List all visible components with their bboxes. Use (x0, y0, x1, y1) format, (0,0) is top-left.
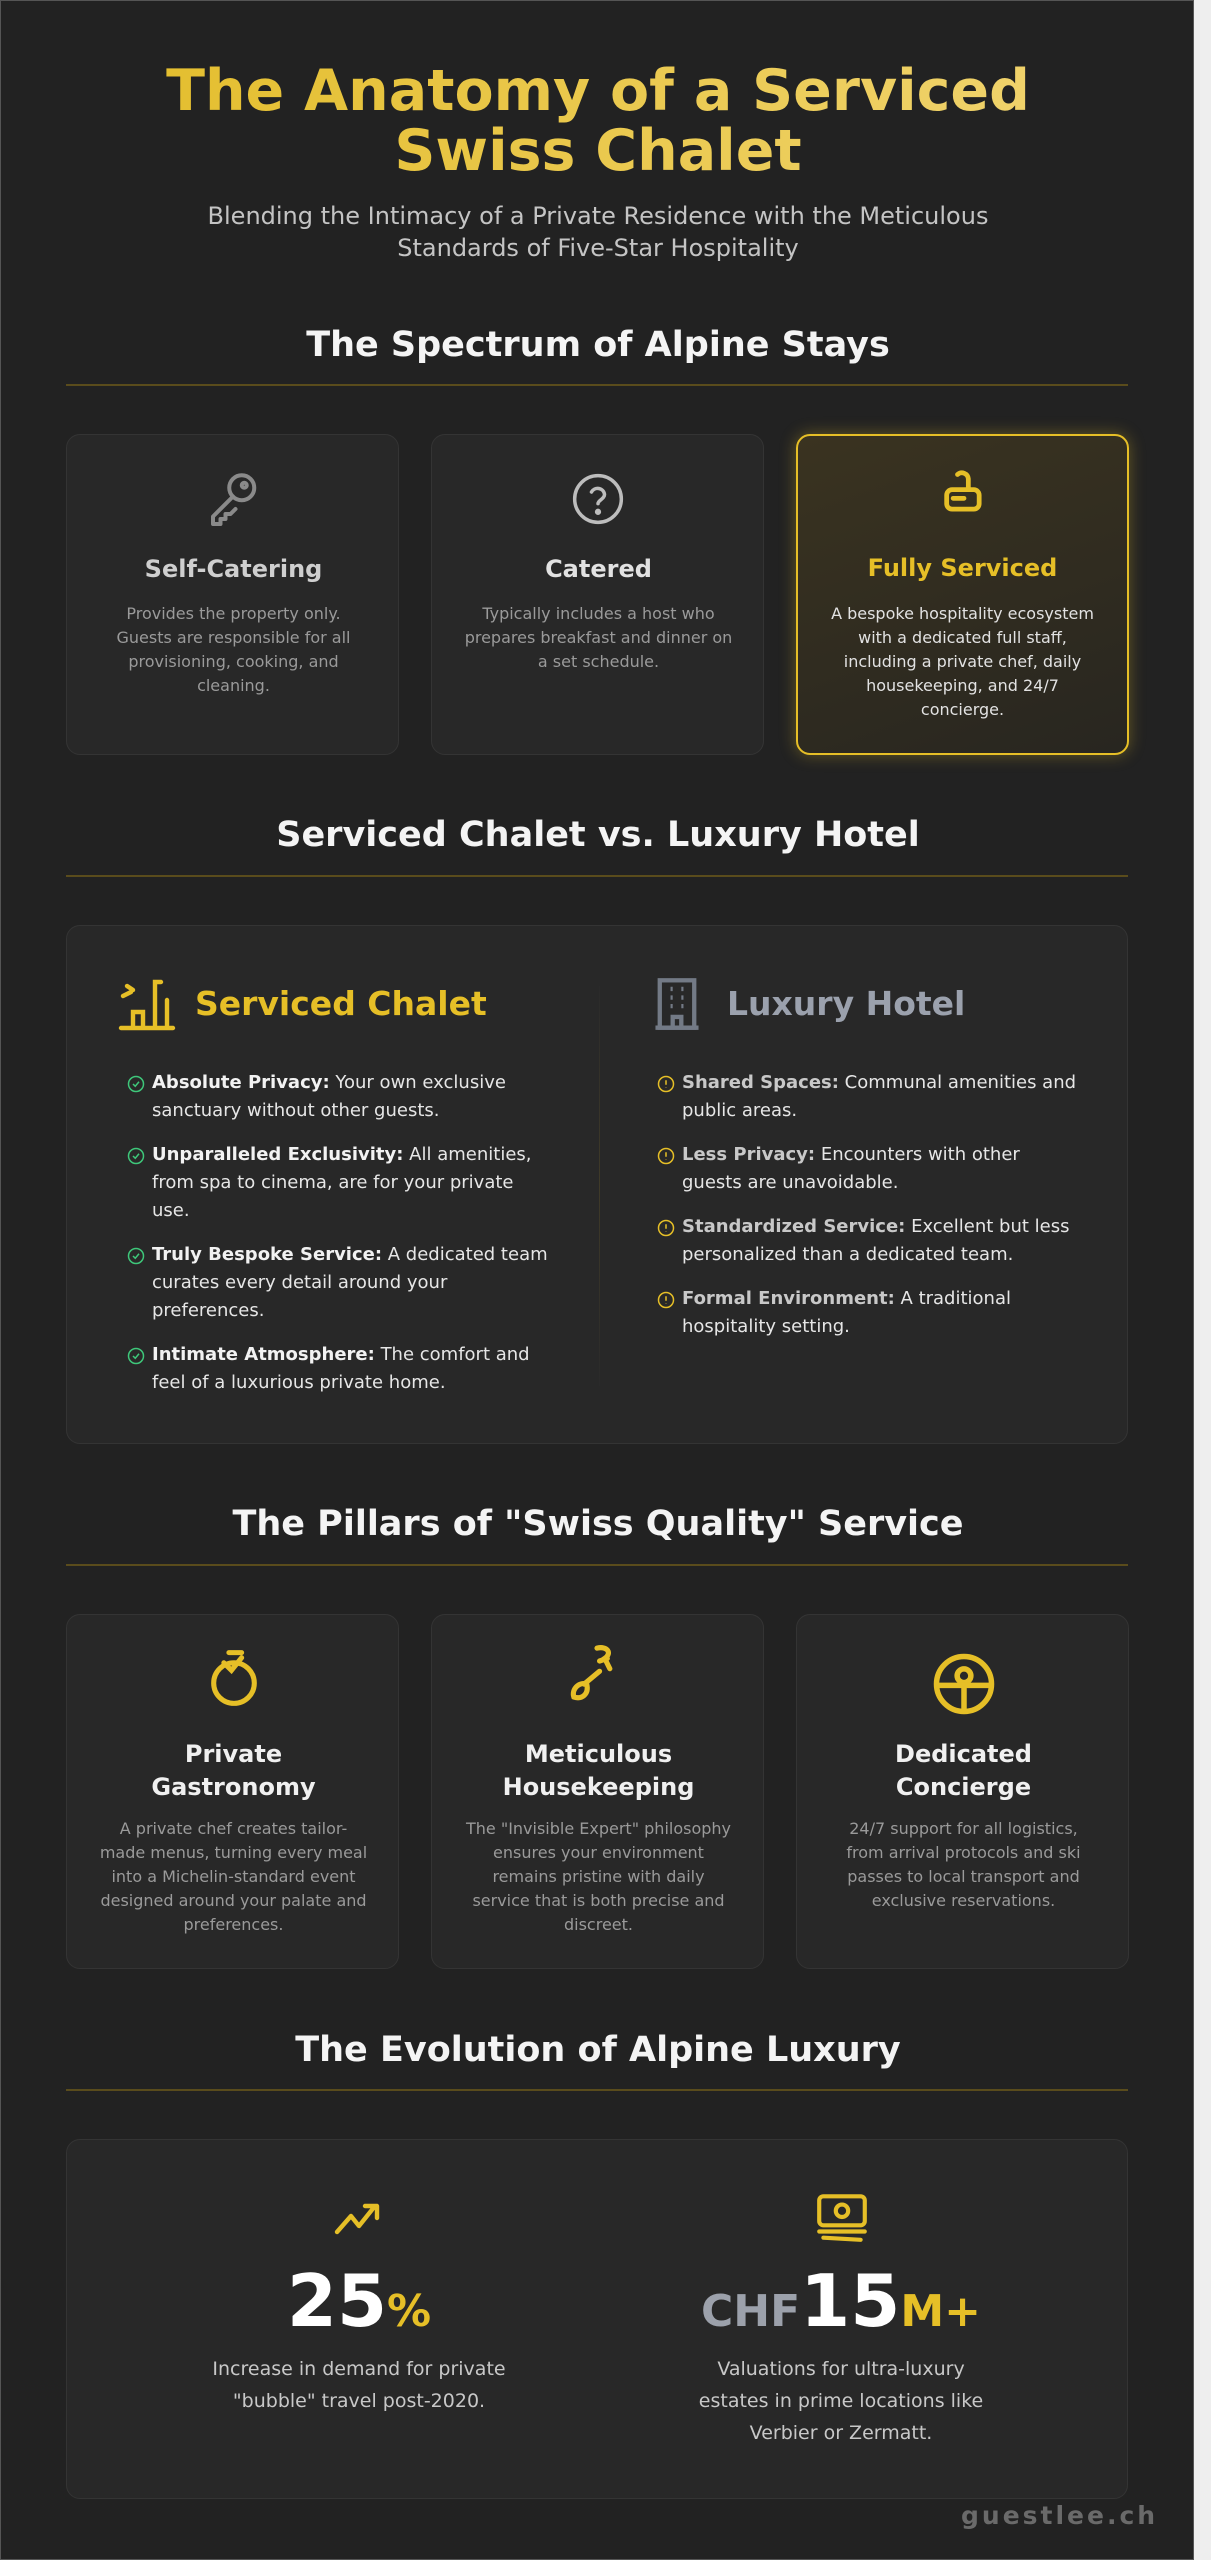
card text: 24/7 support for all logistics, from arrival protocols and ski passes to local transport and exclusive reservations. (846, 1819, 1081, 1910)
card title: Gastronomy (151, 1773, 316, 1801)
card title: Catered (545, 555, 652, 583)
icon: key (211, 473, 256, 526)
text: Increase in demand for private "bubble" travel post-2020. (212, 2358, 506, 2412)
title (1, 61, 1195, 181)
icon: housekeeping (570, 1645, 612, 1700)
column: serviced chalet (118, 980, 548, 1393)
panel: fully serviced (796, 434, 1129, 755)
panel: gastronomy (66, 1614, 399, 1969)
panel: stats (66, 2139, 1128, 2499)
number: CHF15M+ (701, 2259, 981, 2343)
title: Swiss Chalet (394, 118, 802, 184)
icon: gastronomy (211, 1650, 257, 1706)
icon: bell/service (944, 470, 982, 512)
heading: comparison: Serviced Chalet vs. Luxury Hotel (276, 815, 920, 855)
card title: Housekeeping (503, 1773, 694, 1801)
icon: trend (334, 2204, 380, 2234)
panel: catered (431, 434, 764, 755)
stat: 25% (212, 2204, 506, 2412)
heading: Serviced Chalet (195, 984, 487, 1023)
list: Truly Bespoke Service: A dedicated team curates every detail around your preferences. (152, 1244, 548, 1321)
card text: A bespoke hospitality ecosystem with a dedicated full staff, including a private chef, daily housekeeping, and 24/7 concierge. (831, 604, 1094, 719)
list: Formal Environment: A traditional hospitality setting. (682, 1288, 1011, 1337)
card title (895, 1740, 1032, 1801)
list: Unparalleled Exclusivity: All amenities, from spa to cinema, are for your private use. (152, 1144, 532, 1221)
list (658, 1072, 1076, 1337)
heading: Luxury Hotel (727, 984, 965, 1023)
list: Shared Spaces: Communal amenities and public areas. (682, 1072, 1076, 1121)
list: Standardized Service: Excellent but less personalized than a dedicated team. (682, 1216, 1069, 1265)
subtitle (208, 202, 988, 262)
list: Intimate Atmosphere: The comfort and feel of a luxurious private home. (152, 1344, 530, 1393)
card title: Private (185, 1740, 282, 1768)
card title: Concierge (896, 1773, 1031, 1801)
icon: question (572, 474, 624, 524)
card title: Fully Serviced (868, 554, 1057, 582)
list: Absolute Privacy: Your own exclusive sanctuary without other guests. (152, 1072, 506, 1121)
heading: spectrum: The Spectrum of Alpine Stays (306, 325, 890, 365)
icon: chalet (118, 980, 176, 1030)
icon: building (656, 978, 698, 1030)
card title (503, 1740, 694, 1801)
title: The Anatomy of a Serviced (166, 58, 1030, 124)
card text: A private chef creates tailor-made menus, turning every meal into a Michelin-standard event designed around your palate and preferences. (100, 1819, 367, 1934)
card text: Typically includes a host who prepares breakfast and dinner on a set schedule. (465, 604, 732, 671)
heading: pillars: The Pillars of "Swiss Quality" Service (232, 1504, 964, 1544)
subtitle: Blending the Intimacy of a Private Residence with the Meticulous (208, 202, 988, 230)
card text: The "Invisible Expert" philosophy ensures your environment remains pristine with daily service that is both precise and discreet. (466, 1819, 731, 1934)
panel: concierge (796, 1614, 1129, 1969)
list (128, 1072, 548, 1393)
panel: self-catering (66, 434, 399, 755)
icon: money (817, 2194, 867, 2242)
card title (151, 1740, 316, 1801)
panel: housekeeping (431, 1614, 764, 1969)
stat: CHF 15M+ (699, 2194, 983, 2444)
panel: comparison (66, 925, 1128, 1444)
number: 25% (287, 2259, 431, 2343)
icon: concierge (934, 1654, 994, 1714)
subtitle: Standards of Five-Star Hospitality (397, 234, 799, 262)
card text: Provides the property only. Guests are responsible for all provisioning, cooking, and cleaning. (117, 604, 350, 695)
watermark: guestlee.ch (961, 2501, 1158, 2530)
card title: Meticulous (525, 1740, 672, 1768)
heading: evolution: The Evolution of Alpine Luxury (295, 2030, 901, 2070)
column: luxury hotel (656, 978, 1076, 1337)
card title: Self-Catering (145, 555, 322, 583)
list: Less Privacy: Encounters with other guests are unavoidable. (682, 1144, 1020, 1193)
card title: Dedicated (895, 1740, 1032, 1768)
text: Valuations for ultra-luxury estates in prime locations like Verbier or Zermatt. (699, 2358, 983, 2444)
